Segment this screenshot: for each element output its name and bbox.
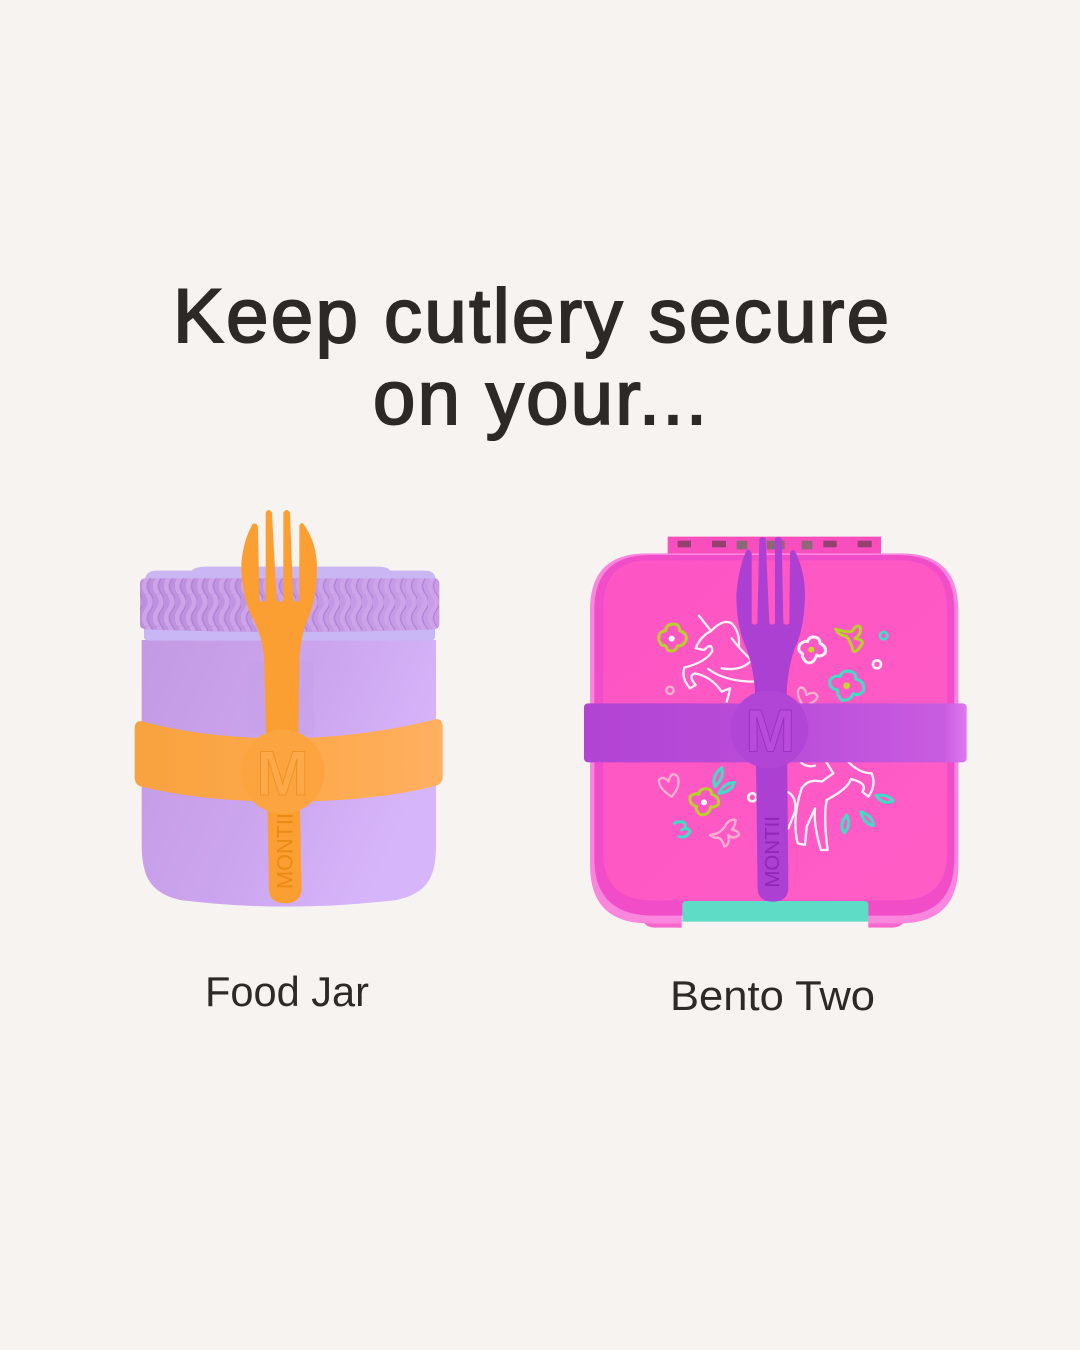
flower lime lower [690,789,719,815]
product: food jar [135,510,443,907]
dot pink [666,687,674,694]
product: bento two [584,537,967,928]
fork label: MONTII [761,816,784,888]
flower white [799,637,826,663]
label: food jar: Food Jar [205,968,369,1015]
heart top [798,688,818,703]
dot teal [880,632,887,639]
flower white centre [669,636,675,642]
lid decorations [659,616,893,850]
dot white lower [748,793,756,801]
orange clasp with logo: M [256,739,309,809]
flower white centre dot [808,647,814,653]
orange fork [241,510,317,903]
dot white [873,660,881,668]
purple clasp with logo: M [745,698,795,765]
embossed logo on jar [247,662,313,735]
teal latch [682,901,868,922]
teal drops [714,768,893,833]
feet [643,917,907,928]
unicorn bottom [787,760,874,850]
orange band [135,719,443,802]
teal squiggle [674,822,690,837]
title [173,274,889,441]
fork label: MONTII [273,813,298,889]
sprout lime [836,626,862,651]
orange clasp with logo [241,730,325,814]
flower teal [830,671,864,700]
wave ring lid [140,578,439,632]
jar body [142,640,436,907]
purple fork [736,537,805,902]
bento lid panel [603,560,947,900]
pink sprout [710,820,739,847]
flower lime lower dot [701,799,707,805]
heart lower [659,774,679,797]
bento rim [594,555,954,916]
unicorn top [683,616,755,702]
title: on your... [373,356,707,441]
jar lid top [145,567,436,579]
flower lime [659,624,686,651]
purple clasp with logo [730,690,808,768]
label: bento two: Bento Two [670,972,875,1019]
flower teal centre dot [843,682,850,689]
title: Keep cutlery secure [173,274,889,359]
hinge top [668,537,881,562]
purple band [584,703,967,762]
bento outer shell [590,553,958,923]
lid seal strip [144,628,435,641]
